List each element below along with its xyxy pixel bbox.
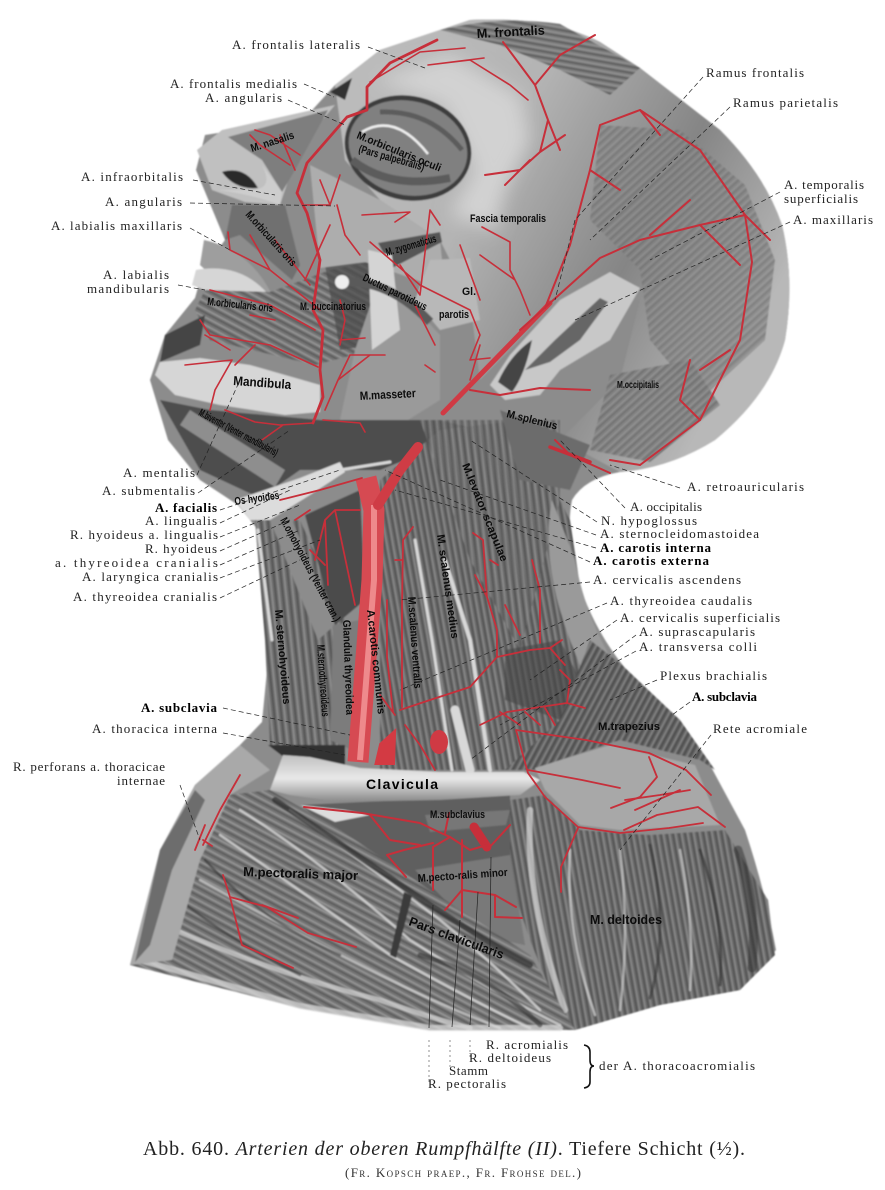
left labels: A. subclavia: [141, 700, 218, 715]
muscle and bone labels: M. deltoides: [590, 912, 662, 927]
hairline: [330, 78, 352, 100]
left labels: A. angularis: [105, 194, 182, 209]
nose: [197, 105, 335, 205]
left labels: A. laryngica cranialis: [82, 569, 218, 584]
nasal wing: [218, 165, 282, 205]
superficial temporal artery (main trunk): [443, 303, 550, 413]
muscle and bone labels: [197, 22, 662, 962]
right labels: N. hypoglossus: [601, 513, 697, 528]
pectoral fibres: [140, 810, 560, 1028]
left labels: A. thoracica interna: [92, 721, 217, 736]
muscle and bone labels: M. scalenus medius: [434, 534, 461, 639]
muscle and bone labels: Gl.: [462, 286, 476, 298]
thoracoacromial labels with brace: R. deltoideus: [469, 1050, 551, 1065]
pectoralis minor: [415, 855, 525, 945]
hyoid: [235, 462, 345, 520]
right labels: A. carotis interna: [600, 540, 712, 555]
muscle and bone labels: M. zygomaticus: [385, 233, 438, 259]
skull and scalp: [335, 20, 789, 472]
thoracoacromial labels with brace: R. acromialis: [486, 1037, 568, 1052]
pectoral and perforating branches: [195, 775, 356, 968]
left labels: A. mentalis: [123, 465, 195, 480]
right labels: Rete acromiale: [713, 721, 807, 736]
left labels: mandibularis: [87, 281, 169, 296]
facial artery and branches: [185, 40, 530, 440]
subclavius: [425, 810, 510, 832]
buccinator and lower orbicularis: [195, 262, 372, 365]
upper lip muscle: [225, 205, 300, 280]
muscle and bone labels: M.pectoralis major: [243, 864, 358, 883]
silhouette: [130, 20, 789, 1030]
left labels: R. perforans a. thoracicae: [13, 759, 165, 774]
right labels: Ramus frontalis: [706, 65, 804, 80]
leader lines: [178, 47, 790, 1028]
neck arteries: [280, 478, 725, 892]
shadow above clavicle: [268, 745, 345, 770]
muscle and bone labels: M.sternothyreoideus: [314, 644, 331, 717]
muscle and bone labels: M.orbicularis oris: [207, 296, 274, 315]
muscle and bone labels: Ductus parotideus: [361, 272, 429, 313]
shaded anatomy base: [130, 20, 789, 1030]
credit line: (Fr. Kopsch praep., Fr. Frohse del.): [345, 1165, 581, 1180]
left labels: R. hyoideus a. lingualis: [70, 527, 218, 542]
dark cheek shadow: [325, 262, 372, 350]
left labels: A. frontalis medialis: [170, 76, 297, 91]
parotid duct: [345, 282, 430, 322]
deltoid fibres: [650, 845, 753, 998]
muscle and bone labels: M. frontalis: [476, 22, 545, 41]
muscle and bone labels: Pars clavicularis: [407, 914, 506, 962]
right labels: A. sternocleidomastoidea: [600, 526, 759, 541]
occipital muscle: [590, 360, 720, 462]
right labels: A. temporalis: [784, 177, 864, 192]
left labels: a. thyreoidea cranialis: [55, 555, 218, 570]
trapezius: [505, 640, 715, 770]
thoracoacromial labels with brace: R. pectoralis: [428, 1076, 506, 1091]
zygomaticus: [378, 232, 442, 268]
muscle and bone labels: Mandibula: [233, 373, 292, 392]
rib shadow marks: [135, 790, 205, 962]
thoracoacromial labels with brace: [428, 1037, 755, 1091]
mandible: [155, 358, 320, 415]
subclavian fossa: [300, 795, 525, 945]
masseter tendon: [368, 250, 400, 350]
muscle and bone labels: M.levator scapulae: [459, 462, 510, 563]
muscle and bone labels: M.subclavius: [430, 809, 485, 821]
anatomical illustration: head, neck and shoulder: [130, 20, 790, 1085]
clavipectoral light strip: [300, 805, 370, 822]
right labels: A. suprascapularis: [639, 624, 755, 639]
orbicularis oculi: [333, 82, 483, 214]
muscle and bone labels: M.masseter: [359, 386, 416, 403]
muscle and bone labels: M. buccinatorius: [300, 301, 366, 313]
thoracoacromial artery: [304, 807, 522, 918]
splenius: [500, 410, 590, 490]
sternal band: [130, 745, 270, 965]
submandibular muscles: [160, 400, 480, 498]
ear: [490, 272, 640, 400]
masseter: [340, 255, 440, 425]
right labels: Ramus parietalis: [733, 95, 838, 110]
nostril: [222, 170, 258, 188]
muscle and bone labels: Glandula thyreoidea: [340, 620, 355, 716]
muscle and bone labels: M.orbicularis oris: [243, 209, 299, 269]
left labels: A. frontalis lateralis: [232, 37, 360, 52]
muscle and bone labels: Fascia temporalis: [470, 213, 546, 225]
muscle and bone labels: M.occipitalis: [617, 380, 659, 391]
upper lip: [200, 240, 272, 295]
muscle and bone labels: M.pecto-ralis minor: [417, 867, 509, 885]
left labels: A. thyreoidea cranialis: [73, 589, 217, 604]
digastric: [180, 410, 285, 487]
frontalis muscle: [440, 21, 640, 95]
pectoralis major: [130, 790, 575, 1030]
nasalis: [228, 110, 328, 192]
clavicle: [270, 755, 540, 802]
muscle and bone labels: A.carotis communis: [364, 609, 387, 715]
left labels: A. labialis maxillaris: [51, 218, 182, 233]
clavicular head cut: [390, 892, 412, 958]
left labels: A. submentalis: [102, 483, 195, 498]
muscle and bone labels: M.omohyoideus (Venter cran.): [277, 516, 343, 624]
right labels: A. retroauricularis: [687, 479, 804, 494]
right labels: A. occipitalis: [630, 499, 702, 514]
right labels: A. cervicalis superficialis: [620, 610, 780, 625]
right labels: A. subclavia: [692, 689, 758, 704]
muscle and bone labels: Clavicula: [366, 776, 438, 792]
thoracoacromial labels with brace: Stamm: [449, 1063, 488, 1078]
right labels: A. cervicalis ascendens: [593, 572, 741, 587]
left labels: A. facialis: [155, 500, 217, 515]
muscle and bone labels: parotis: [439, 309, 469, 321]
acromion light: [535, 745, 720, 830]
left labels: A. lingualis: [145, 513, 217, 528]
muscle and bone labels: M.orbicularis oculi: [355, 130, 443, 174]
common carotid artery: [358, 447, 448, 762]
right labels: A. maxillaris: [793, 212, 873, 227]
right labels: superficialis: [784, 191, 858, 206]
left labels: A. angularis: [205, 90, 282, 105]
right labels: A. carotis externa: [593, 553, 710, 568]
deltoid: [510, 795, 775, 1030]
left labels: [13, 37, 360, 788]
plexus and tendon streaks: [258, 462, 490, 770]
right labels: [593, 65, 873, 736]
muscle and bone labels: M.trapezius: [598, 721, 660, 733]
left labels: R. hyoideus: [145, 541, 217, 556]
muscle and bone labels: (Pars palpebralis): [357, 143, 426, 174]
cheek: [310, 165, 445, 290]
muscle and bone labels: M. sternohyoideus: [272, 609, 292, 705]
muscle and bone labels: Os hyoides: [234, 490, 280, 508]
lower lip: [192, 268, 268, 296]
right labels: A. transversa colli: [639, 639, 757, 654]
parotid gland: [415, 258, 480, 330]
epicranial striations: [590, 125, 775, 400]
right labels: A. thyreoidea caudalis: [610, 593, 752, 608]
dotted guide lines: [429, 1040, 470, 1085]
thoracoacromial labels with brace: der A. thoracoacromialis: [599, 1058, 755, 1073]
muscle and bone labels: M.splenius: [505, 408, 559, 432]
left labels: A. infraorbitalis: [81, 169, 183, 184]
right labels: Plexus brachialis: [660, 668, 767, 683]
occipital artery stub: [550, 447, 590, 462]
muscle and bone labels: M.biventer (Venter mandibularis): [197, 407, 280, 459]
muscle and bone labels: M.scalenus ventralis: [405, 596, 423, 689]
chin shadow: [160, 315, 205, 362]
caption: Abb. 640. Arterien der oberen Rumpfhälfte (II). Tiefere Schicht (½).: [143, 1138, 745, 1160]
fat lobules: [335, 275, 349, 289]
temple highlight: [375, 55, 530, 230]
left labels: A. labialis: [103, 267, 169, 282]
neck muscles: [255, 420, 640, 770]
muscle and bone labels: M. nasalis: [249, 130, 296, 155]
left labels: internae: [117, 773, 165, 788]
temporal artery branches: [470, 35, 770, 473]
